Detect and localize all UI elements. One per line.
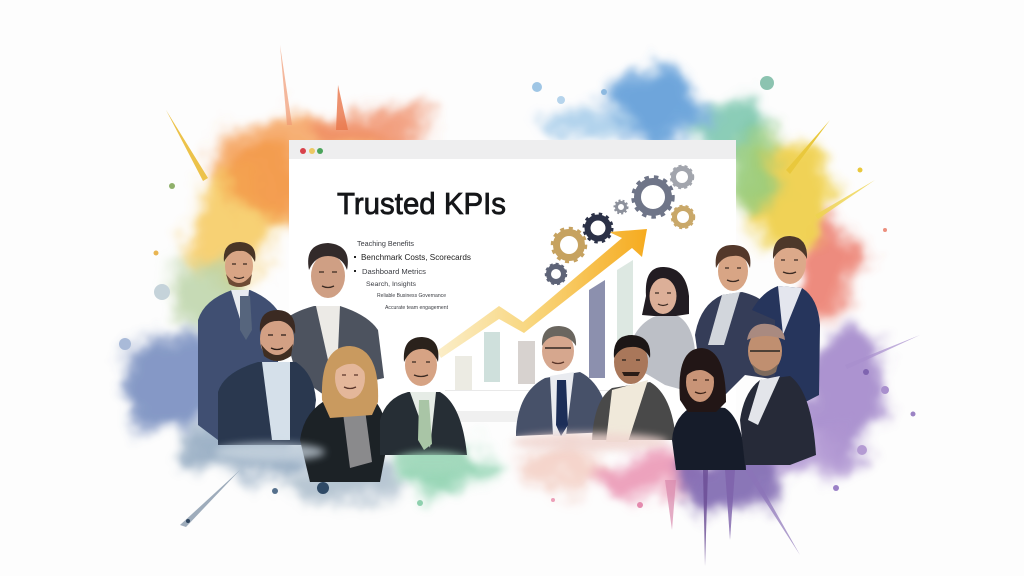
person: back left bearded man — [198, 242, 282, 440]
bottom watercolor fade over figures — [215, 433, 668, 472]
growth arrow — [437, 229, 647, 358]
wash: violet bottom right — [675, 450, 795, 510]
window control: green dot — [317, 148, 323, 154]
wash: purple right — [803, 333, 887, 457]
person: back second man grey suit — [282, 243, 384, 410]
title: Trusted KPIs — [337, 186, 506, 221]
wash: teal upper right — [691, 106, 759, 154]
wash: blue top — [603, 71, 707, 139]
window control: yellow dot — [309, 148, 315, 154]
bullet line 6: Accurate team engagement — [385, 305, 449, 311]
browser window panel — [289, 140, 736, 422]
bar 5 — [617, 260, 633, 345]
wash: pink bottom right — [598, 456, 702, 500]
person: man in grey blazer — [592, 335, 676, 442]
wash: sage left — [171, 255, 239, 335]
bullet line 3: Dashboard Metrics — [362, 269, 427, 276]
wash: orange upper left — [210, 113, 400, 217]
bar 2 — [484, 332, 500, 382]
bar 3 — [518, 341, 535, 384]
watercolor splash: background wash — [122, 71, 887, 510]
person: centre man green tie — [380, 337, 467, 455]
wash: red orange top — [308, 110, 432, 146]
wash: yellow left — [190, 163, 274, 287]
gear: grey tiny — [614, 200, 628, 214]
bullet line 5: Reliable Business Governance — [377, 293, 446, 299]
bullet line 4: Search, Insights — [366, 282, 416, 288]
wash: peach bottom — [510, 450, 620, 486]
person: man with glasses and blue tie — [516, 326, 611, 436]
chart baseline — [445, 390, 615, 391]
wash: lilac lower right — [760, 420, 850, 480]
window body — [289, 140, 736, 422]
gear cluster — [546, 166, 694, 284]
splatter droplets and streaks — [119, 45, 920, 566]
bullet dots — [354, 256, 356, 272]
gear: navy — [584, 214, 612, 242]
fade: bottom left — [215, 443, 325, 461]
person: man with cap and glasses — [740, 324, 816, 465]
person: woman with dark hair centre right — [632, 267, 695, 392]
bullet line 1: Teaching Benefits — [357, 241, 415, 248]
window control: red dot — [300, 148, 306, 154]
bar 1 — [455, 356, 472, 390]
wash: yellow right — [748, 140, 832, 250]
person: back right man striped tie — [695, 245, 778, 400]
gear: grey upper — [671, 166, 693, 188]
person: woman front right — [672, 348, 746, 470]
bar 4 — [589, 280, 605, 378]
fade: bottom centre — [394, 452, 470, 472]
gear: slate small — [546, 264, 566, 284]
wash: teal bottom centre — [390, 441, 490, 489]
bullet line 2: Benchmark Costs, Scorecards — [361, 252, 471, 262]
person: far right man navy suit — [752, 236, 820, 410]
wash: orange core — [228, 138, 296, 222]
person: blonde woman — [300, 346, 388, 482]
window title bar — [289, 140, 736, 159]
gear: slate big — [633, 177, 673, 217]
wash: slate bottom left — [175, 426, 315, 474]
wash: green right — [729, 123, 781, 207]
team of people — [198, 236, 820, 482]
gear: tan large — [552, 228, 586, 262]
wash: pale blue top — [543, 110, 627, 140]
gear: tan small — [672, 206, 694, 228]
bullet text block — [354, 241, 471, 311]
person: front left bearded man navy suit — [218, 310, 316, 445]
wash: red right — [793, 220, 857, 320]
wash: grey bottom — [280, 460, 400, 504]
fade: bottom right — [512, 433, 668, 451]
bar chart — [438, 260, 633, 422]
wash: blue lower left — [122, 333, 222, 437]
